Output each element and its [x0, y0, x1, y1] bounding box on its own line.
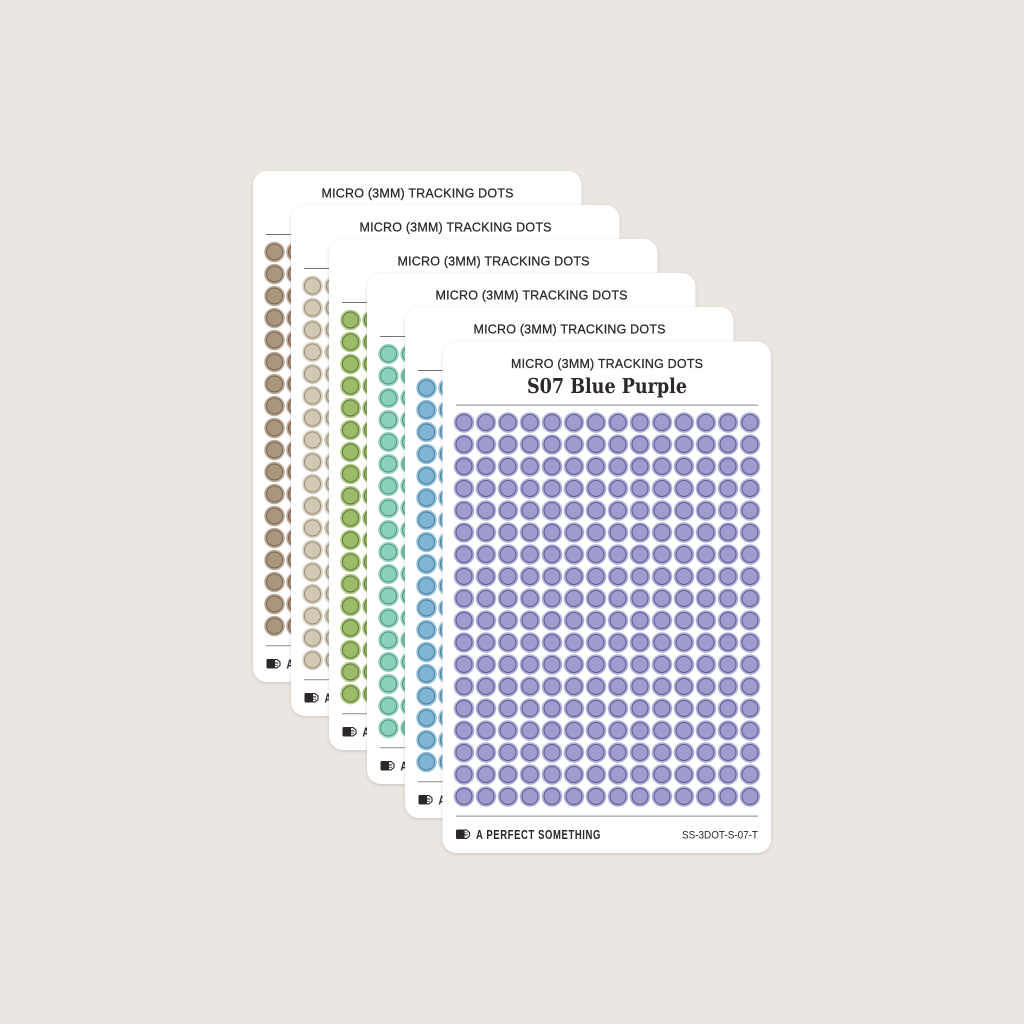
- card: S07 blue purple front sheet: [442, 342, 771, 853]
- icon: brand logo: [304, 693, 318, 702]
- dot grid: brown: [264, 241, 572, 637]
- brand name: A PERFECT SOMETHING: [362, 726, 488, 740]
- brand name: A PERFECT SOMETHING: [438, 794, 564, 808]
- icon: brand logo: [456, 830, 470, 839]
- icon: brand logo: [266, 659, 280, 668]
- icon: brand logo: [418, 795, 432, 804]
- brand name: A PERFECT SOMETHING: [286, 658, 412, 672]
- product code: SS-3DOT-S-07-T: [682, 830, 758, 842]
- card heading: MICRO (3MM) TRACKING DOTS: [360, 220, 552, 234]
- dot grid: beige: [302, 275, 610, 671]
- card heading: MICRO (3MM) TRACKING DOTS: [322, 186, 514, 200]
- brand name: A PERFECT SOMETHING: [400, 760, 526, 774]
- card: blue sheet: [405, 307, 734, 818]
- card: green sheet: [329, 239, 658, 750]
- product name: S07 Blue Purple: [527, 374, 687, 398]
- card heading: MICRO (3MM) TRACKING DOTS: [436, 288, 628, 302]
- brand name: A PERFECT SOMETHING: [476, 828, 601, 842]
- dot grid: teal: [378, 343, 686, 739]
- card: teal sheet: [367, 273, 696, 784]
- card heading: MICRO (3MM) TRACKING DOTS: [474, 322, 666, 336]
- dot grid: green: [340, 309, 648, 705]
- card: beige sheet: [291, 205, 620, 716]
- icon: brand logo: [380, 761, 394, 770]
- card heading: MICRO (3MM) TRACKING DOTS: [398, 254, 590, 268]
- card heading: MICRO (3MM) TRACKING DOTS: [511, 357, 703, 371]
- brand name: A PERFECT SOMETHING: [324, 692, 450, 706]
- card: brown sheet: [253, 171, 582, 682]
- dot grid: blue purple: [453, 412, 761, 808]
- icon: brand logo: [342, 727, 356, 736]
- dot grid: blue: [416, 377, 724, 773]
